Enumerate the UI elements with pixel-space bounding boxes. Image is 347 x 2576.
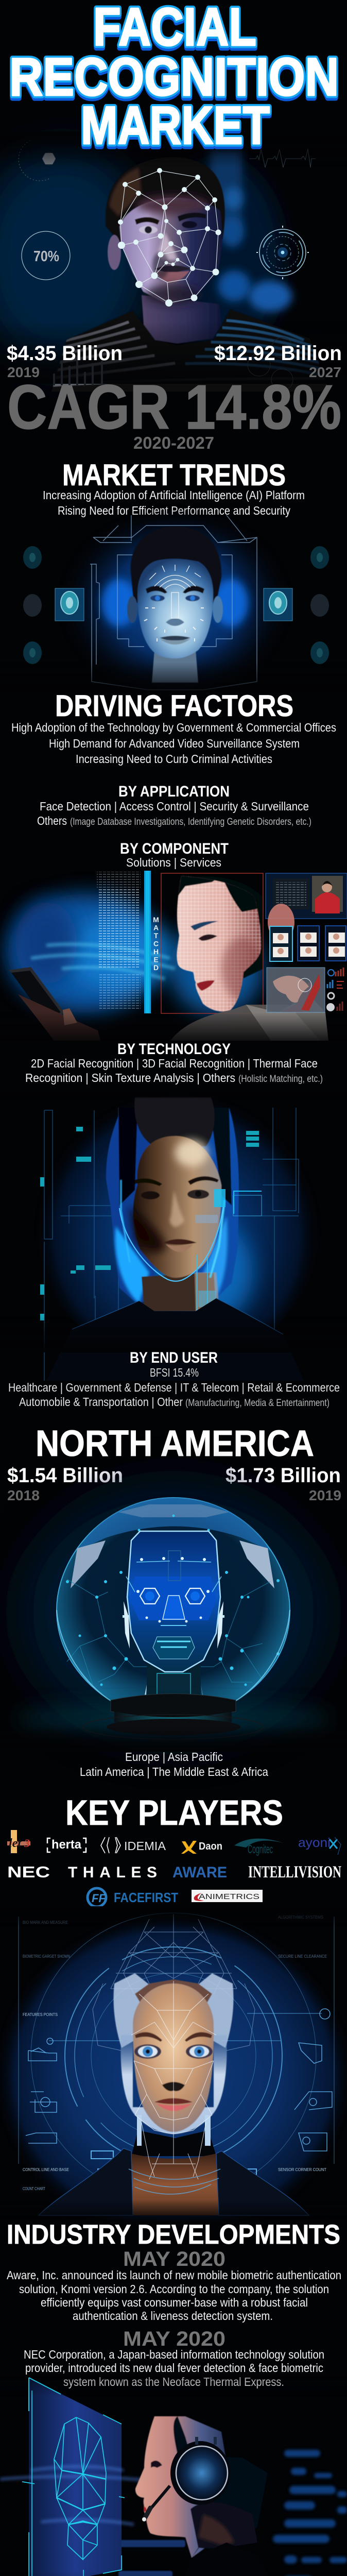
CAGR: 2020-2027 (133, 433, 214, 452)
faint chart and dials (54, 337, 293, 391)
other regions list: Latin America | The Middle East & Africa (80, 1765, 268, 1778)
market size 2027: $12.92 Billion (214, 342, 342, 365)
MATCHED vertical label: M (153, 916, 159, 924)
MATCHED vertical label: E (153, 955, 159, 963)
market trends list: Increasing Adoption of Artificial Intelligence (AI) Platform (43, 488, 305, 502)
north america 2019 value (225, 1464, 341, 1503)
driving factors list: High Demand for Advanced Video Surveillance System (49, 737, 300, 750)
title: MARKET (81, 96, 270, 156)
segment: by technology: Recognition | Skin Texture Analysis | Others (25, 1071, 235, 1084)
image: woman with geometric face mesh on blueprint (0, 1906, 347, 2241)
segment: by end user: Automobile & Transportation | Other (19, 1395, 183, 1409)
logo: FaceFirst (88, 1888, 178, 1907)
face thumbnails (270, 926, 346, 961)
segment: by application: Others (37, 814, 67, 827)
blueprint labels (23, 1915, 327, 2191)
profile panel (266, 873, 347, 919)
segment: by technology (25, 1041, 323, 1084)
logo: Animetrics: ANIMETRICS (199, 1892, 259, 1901)
blueprint labels: BIO MARK AND MEASURE (23, 1920, 68, 1925)
driving factors list (11, 721, 336, 766)
market size 2027: 2027 (309, 364, 341, 380)
segment: by application: Face Detection | Access Control | Security & Surveillance (40, 800, 309, 813)
suit (165, 1005, 329, 1051)
segment: by application: BY APPLICATION (118, 783, 230, 800)
chest (128, 2154, 220, 2215)
mini charts (326, 968, 344, 1011)
segment: by technology: (Holistic Matching, etc.) (238, 1074, 323, 1084)
MATCHED vertical label: D (153, 963, 159, 972)
red match frame (161, 873, 263, 1013)
logo: Aware: AWARE (172, 1864, 227, 1881)
holographic glitch blocks (195, 1189, 262, 1324)
dome network (67, 1579, 270, 1685)
jacket (39, 2148, 309, 2215)
MATCHED vertical label: T (154, 931, 159, 940)
logo: THALES: THALES (68, 1864, 157, 1881)
blueprint labels: BIOMETRIC GARGET SHOWN (23, 1954, 70, 1959)
image: robot head in glass dome (0, 1484, 347, 1752)
logo: Cognitec (234, 1839, 283, 1856)
logo: NEC: NEC (7, 1863, 50, 1881)
blueprint labels: SENSOR CORNER COUNT (278, 2167, 326, 2172)
market size 2019: $4.35 Billion (7, 342, 123, 365)
blueprint labels: FEATURES POINTS (23, 2012, 58, 2017)
development: Aware: MAY 2020 (123, 2248, 225, 2270)
development: Aware: authentication & liveness detection system. (73, 2309, 273, 2323)
robot head (123, 1531, 224, 1728)
segment: by end user (8, 1349, 340, 1409)
glass dome (57, 1498, 290, 1702)
market size 2027 (214, 342, 342, 380)
robot neck (138, 1673, 210, 1726)
data read-out columns (97, 872, 141, 1010)
logo: let3: let (9, 1837, 22, 1850)
heading: north america: NORTH AMERICA (36, 1423, 314, 1464)
neck light bars (137, 2115, 211, 2146)
market trends list: Rising Need for Efficient Performance and Security (58, 504, 290, 517)
segment: by end user: BY END USER (130, 1349, 218, 1366)
70% circle badge (22, 231, 70, 280)
logo: herta: herta (51, 1838, 82, 1852)
key player logos (7, 1830, 341, 1907)
development: Aware: efficiently equips vast consumer-base with a robust facial (41, 2296, 308, 2309)
data tags (40, 1127, 259, 1320)
torso (170, 2543, 288, 2576)
development: Aware (7, 2248, 341, 2323)
heading: key players: KEY PLAYERS (65, 1793, 283, 1833)
world map panel (267, 968, 325, 1012)
developments backdrop (0, 2222, 347, 2376)
MATCHED vertical label: A (153, 923, 159, 931)
north america 2019 value: 2019 (309, 1487, 341, 1503)
market size 2019: 2019 (7, 364, 40, 380)
blueprint labels: ALGORITHMIC SYSTEMS (278, 1915, 323, 1920)
north america 2018 value (7, 1464, 123, 1503)
heading: market trends: MARKET TRENDS (62, 459, 286, 492)
logo: Daon: Daon (199, 1841, 222, 1852)
north america 2018 value: $1.54 Billion (7, 1464, 123, 1487)
segment: by technology: BY TECHNOLOGY (117, 1041, 231, 1058)
segment: by technology: 2D Facial Recognition | 3D Facial Recognition | Thermal Face (31, 1057, 318, 1070)
hair wisps (114, 1973, 233, 2134)
headset (142, 2437, 230, 2521)
face mesh (118, 168, 221, 307)
logo: ayonix (298, 1836, 341, 1855)
ear (268, 904, 294, 941)
image: woman with blue holographic hair (0, 1077, 347, 1381)
blueprint labels: COUNT CHART (23, 2187, 45, 2191)
dotted arc and hexagon (19, 140, 56, 181)
segment: by application (37, 783, 311, 827)
segment: by component: Solutions | Services (126, 856, 221, 869)
logo: let3: 3 (24, 1837, 30, 1850)
pulse line (249, 149, 316, 167)
segment: by component: BY COMPONENT (120, 840, 229, 857)
logo: IDEMIA: IDEMIA (124, 1839, 166, 1853)
forehead scan glyph (144, 565, 204, 641)
image: woman scanned by phone (0, 871, 347, 1092)
blueprint labels: CONTROL LINE AND BASE (23, 2167, 69, 2172)
title (9, 0, 339, 156)
image: woman with headset viewing holographic face (0, 2376, 347, 2576)
other regions list: Europe | Asia Pacific (125, 1750, 223, 1764)
market size 2019 (7, 342, 123, 380)
hologram panel (29, 2378, 122, 2576)
blueprint rings (19, 1913, 334, 2198)
MATCHED vertical label: H (153, 947, 159, 956)
logo: let3 (7, 1830, 30, 1853)
other regions list (80, 1750, 268, 1778)
logo: FaceFirst: FF (92, 1892, 106, 1905)
blurred code text (273, 2450, 347, 2576)
logo: IDEMIA (101, 1837, 166, 1853)
logo: Animetrics (192, 1890, 263, 1902)
hero image: man with facial mesh (0, 131, 347, 392)
side biometric tiles (23, 546, 329, 664)
interface lines (44, 1108, 299, 1381)
neck (131, 2130, 216, 2156)
north america 2018 value: 2018 (7, 1487, 40, 1503)
heading: driving factors: DRIVING FACTORS (55, 689, 293, 723)
development: NEC: MAY 2020 (123, 2328, 225, 2350)
driving factors list: Increasing Need to Curb Criminal Activities (76, 752, 272, 766)
market trends list (43, 488, 305, 517)
profile face (135, 2416, 268, 2558)
logo: FaceFirst: FACEFIRST (114, 1890, 178, 1905)
reticle icon (256, 226, 309, 279)
logo: ayonix: ayoni (298, 1836, 331, 1850)
logo: Daon (181, 1841, 222, 1854)
dome pedestal (16, 1694, 331, 1739)
blueprint labels: SECURE LINE CLEARANCE (278, 1954, 327, 1959)
title: MARKET (81, 96, 270, 156)
MATCHED vertical label: C (153, 940, 159, 948)
image: man with forehead scan (0, 505, 347, 701)
north america 2019 value: $1.73 Billion (225, 1464, 341, 1487)
phone and hand (9, 967, 103, 1051)
segment: by end user: BFSI 15.4% (150, 1366, 199, 1379)
dome mesh above head (93, 1914, 255, 2050)
70% circle badge: 70% (33, 248, 59, 265)
blueprint machine parts (26, 2009, 332, 2178)
logo: Cognitec: Cognitec (248, 1842, 273, 1856)
development: NEC: system known as the Neoface Thermal Express. (63, 2375, 284, 2388)
woman profile (175, 876, 268, 1015)
scan frames (90, 515, 257, 690)
mesh lines (129, 1981, 220, 2194)
segment: by component (120, 840, 229, 869)
face rim (120, 2035, 227, 2134)
development: NEC (24, 2328, 324, 2388)
